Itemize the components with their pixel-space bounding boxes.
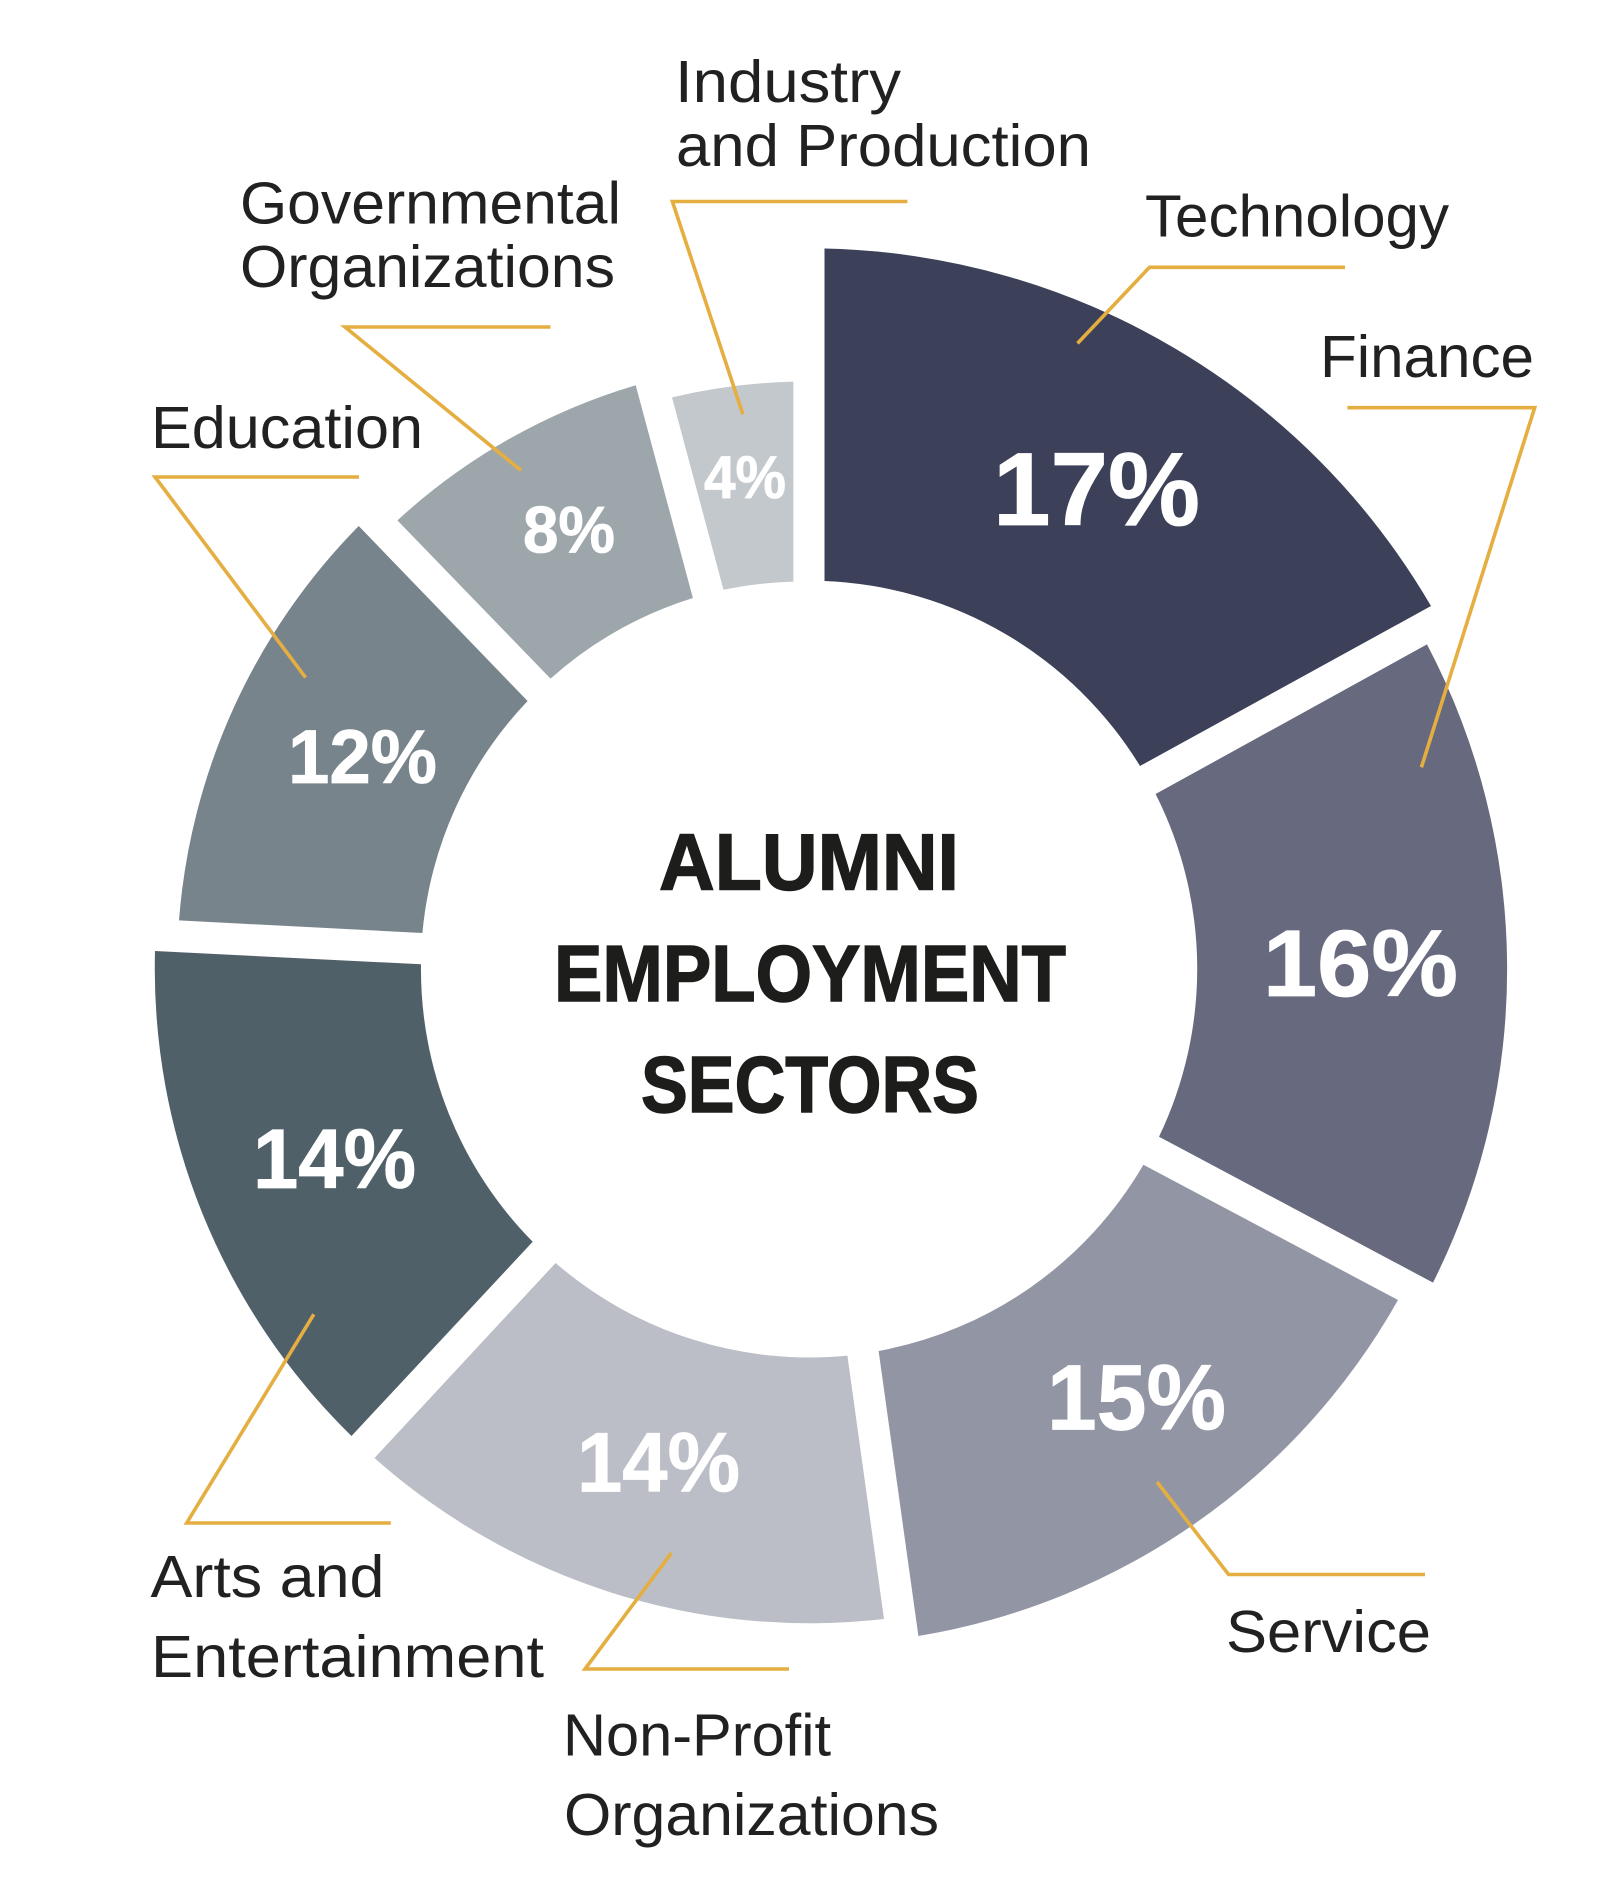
segment: Technology 17% [824,248,1431,766]
center title: ALUMNI [659,817,959,906]
callout: Arts and Entertainment: Arts and [150,1544,384,1610]
callout: Finance: Finance [1320,324,1534,390]
segment: Arts and Entertainment 14%: 14% [253,1112,416,1206]
segment: Industry and Production 4%: 4% [704,444,786,511]
callout: Education [151,395,423,678]
center title: EMPLOYMENT [554,929,1066,1018]
callout: Service: Service [1226,1599,1431,1665]
callout: Education: Education [151,395,423,461]
segment: Education 12%: 12% [288,715,437,800]
segment: Non-Profit Organizations 14% [374,1263,884,1623]
callout: Industry and Production: Industry [675,49,902,115]
callout: Governmental Organizations: Governmental [240,170,621,236]
center title: SECTORS [641,1040,979,1129]
callout: Non-Profit Organizations: Non-Profit [563,1702,831,1768]
segment: Non-Profit Organizations 14%: 14% [577,1415,740,1509]
segment: Finance 16%: 16% [1263,911,1458,1017]
segment: Arts and Entertainment 14% [155,951,533,1436]
callout: Arts and Entertainment: Entertainment [151,1624,544,1690]
callout: Industry and Production [672,49,1091,414]
segment: Service 15%: 15% [1047,1346,1226,1450]
segment: Service 15% [879,1165,1398,1636]
callout: Service [1157,1482,1431,1665]
callout: Industry and Production: and Production [676,113,1091,179]
segment: Governmental Organizations 8% [397,385,693,679]
segment: Finance 16% [1156,644,1507,1283]
segment: Technology 17%: 17% [993,432,1200,548]
donut chart: alumni employment sectors [155,248,1507,1636]
callout: Non-Profit Organizations [563,1553,939,1848]
callout: Governmental Organizations: Organizations [240,234,615,300]
segment: Education 12% [179,526,528,933]
callout: Technology [1078,184,1449,343]
callout: Governmental Organizations [240,170,621,470]
callout: Arts and Entertainment [150,1314,544,1690]
callout: Finance [1320,324,1535,767]
segment: Industry and Production 4% [672,382,793,590]
callout: Technology: Technology [1145,184,1449,250]
segment: Governmental Organizations 8%: 8% [523,492,615,566]
callout: Non-Profit Organizations: Organizations [564,1782,939,1848]
center title [554,817,1066,1129]
